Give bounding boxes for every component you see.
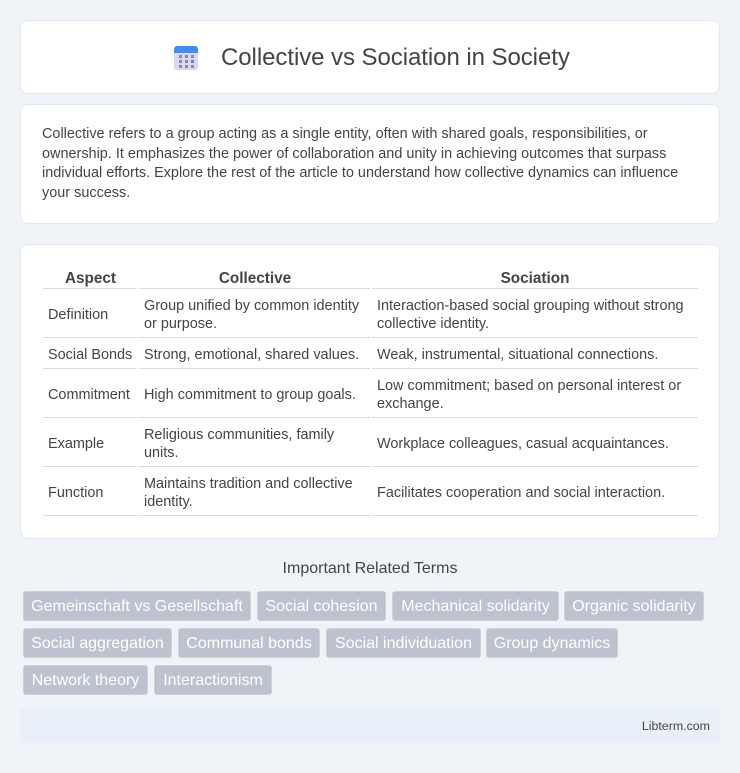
intro text panel: individual efforts. Explore the rest of the article to understand how collective dynamics can influence [42,165,678,181]
intro text panel: ownership. It emphasizes the power of collaboration and unity in achieving outcomes that surpass [42,146,666,162]
tag [392,591,559,621]
tag [326,628,481,658]
tag [23,591,251,621]
tag [486,628,618,658]
tag: Network theory [32,672,139,689]
tag: Communal bonds [186,635,312,652]
tag: Gemeinschaft vs Gesellschaft [31,598,243,615]
row: definition: or purpose. [144,316,217,332]
row: function: Facilitates cooperation and social interaction. [377,485,665,501]
row: social bonds [48,347,658,363]
row: definition: Definition [48,307,108,323]
row: social bonds: Weak, instrumental, situational connections. [377,347,658,363]
tag [257,591,386,621]
comparison table panel [20,244,720,539]
tag: Social cohesion [265,598,378,615]
footer bar [20,709,720,743]
row: function: Function [48,485,103,501]
tag list [23,591,704,695]
row: definition: Interaction-based social grouping without strong [377,298,684,314]
row: definition [48,298,684,332]
title: Collective vs Sociation in Society [221,44,570,71]
header card [20,20,720,94]
row: commitment: Low commitment; based on personal interest or [377,378,681,394]
tag: Group dynamics [494,635,610,652]
row: definition: collective identity. [377,316,489,332]
tag: Social aggregation [31,635,164,652]
tag: Mechanical solidarity [401,598,550,615]
tag: Social individuation [335,635,472,652]
row: example: Workplace colleagues, casual acquaintances. [377,436,669,452]
row: function: Maintains tradition and collective [144,476,353,492]
table header: Collective [219,270,291,287]
row: example: units. [144,445,179,461]
table header [65,270,569,287]
row: example [48,427,669,461]
tag [178,628,320,658]
icon: calendar [174,46,198,70]
intro text panel: your success. [42,185,130,201]
intro text panel: Collective refers to a group acting as a single entity, often with shared goals, responsibilities, or [42,126,648,142]
row: commitment [48,378,681,412]
table header: Sociation [501,270,569,287]
row: commitment: exchange. [377,396,444,412]
row: example: Example [48,436,104,452]
related terms heading: Important Related Terms [283,560,457,577]
row: function [48,476,665,510]
tag [23,628,172,658]
tag: Interactionism [163,672,263,689]
intro text panel [20,104,720,224]
row: commitment: Commitment [48,387,130,403]
table header: Aspect [65,270,116,287]
row: definition: Group unified by common identity [144,298,359,314]
tag [154,665,272,695]
row: social bonds: Social Bonds [48,347,132,363]
tag [564,591,704,621]
tag [23,665,148,695]
row: social bonds: Strong, emotional, shared values. [144,347,359,363]
row: commitment: High commitment to group goals. [144,387,356,403]
row: example: Religious communities, family [144,427,334,443]
tag: Organic solidarity [572,598,696,615]
footer credit: Libterm.com [642,719,710,733]
row: function: identity. [144,494,193,510]
